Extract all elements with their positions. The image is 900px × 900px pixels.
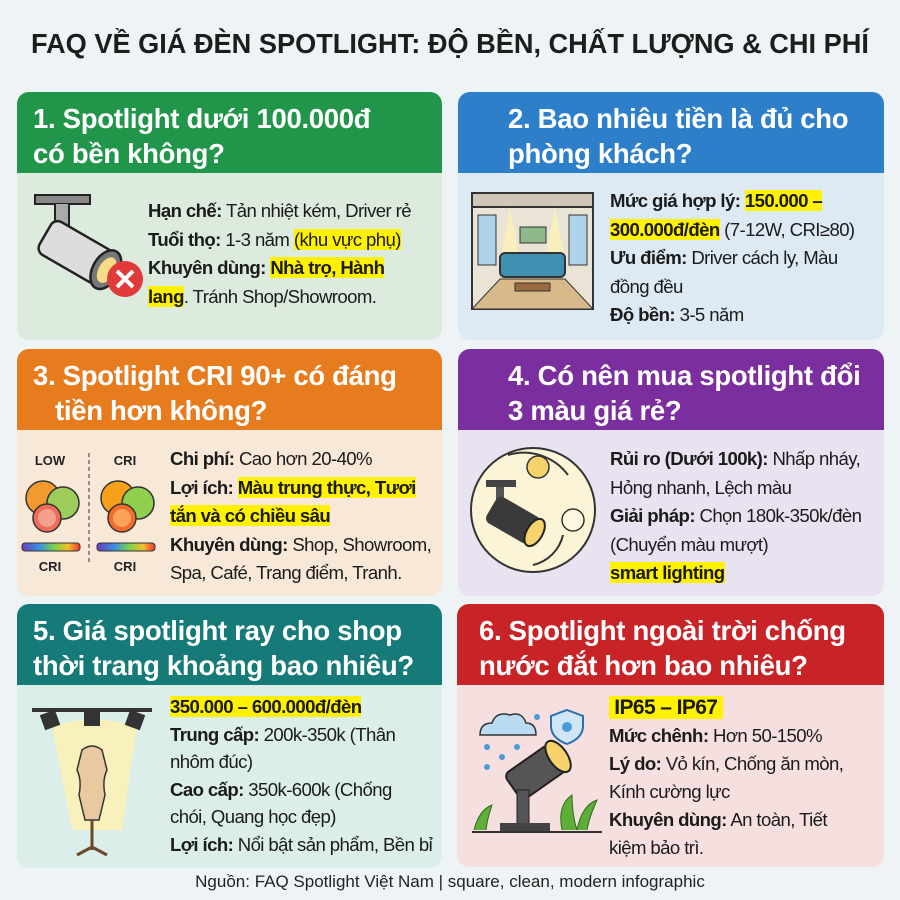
title: FAQ VỀ GIÁ ĐÈN SPOTLIGHT: ĐỘ BỀN, CHẤT LƯỢNG & CHI PHÍ: [31, 28, 869, 59]
icon: CRI fruit comparison: CRI: [114, 559, 136, 574]
text 3: [170, 448, 431, 583]
panel: 6 outdoor waterproof: [457, 604, 884, 867]
heading 1: [17, 92, 442, 173]
heading 6: [457, 604, 884, 685]
text 3: tắn và có chiều sâu: [170, 505, 330, 526]
text 2: Ưu điểm: Driver cách ly, Màu: [610, 247, 838, 268]
heading 6: 6. Spotlight ngoài trời chống: [479, 615, 846, 646]
icon: outdoor spotlight in rain: [472, 708, 602, 833]
text 6: kiệm bảo trì.: [609, 837, 704, 858]
text 1: lang. Tránh Shop/Showroom.: [148, 286, 376, 306]
heading 3: tiền hơn không?: [55, 395, 267, 426]
text 6: Mức chênh: Hơn 50-150%: [609, 725, 822, 746]
heading 3: 3. Spotlight CRI 90+ có đáng: [33, 360, 397, 391]
heading 3: [17, 349, 442, 430]
heading 4: 3 màu giá rẻ?: [508, 395, 681, 426]
heading 5: thời trang khoảng bao nhiêu?: [33, 650, 414, 681]
icon: color-changing spotlight: [470, 447, 596, 573]
text 4: Hỏng nhanh, Lệch màu: [610, 476, 791, 498]
heading 1: 1. Spotlight dưới 100.000đ: [33, 103, 370, 134]
icon: spotlight with x: [34, 194, 143, 297]
text 1: Khuyên dùng: Nhà trọ, Hành: [148, 257, 384, 278]
text 4: smart lighting: [610, 562, 725, 583]
icon: CRI fruit comparison: [22, 453, 156, 574]
icon: CRI fruit comparison: CRI: [39, 559, 61, 574]
text 3: Khuyên dùng: Shop, Showroom,: [170, 534, 431, 554]
icon: CRI fruit comparison: CRI: [114, 453, 136, 468]
heading 4: [458, 349, 884, 430]
heading 4: 4. Có nên mua spotlight đổi: [508, 360, 860, 391]
text 6: Kính cường lực: [609, 781, 730, 802]
text 5: [170, 696, 433, 855]
icon: living room: [470, 192, 594, 310]
text 5: nhôm đúc): [170, 751, 252, 772]
panel: 3 CRI: [17, 349, 442, 596]
text 6: IP65 – IP67: [614, 696, 717, 719]
text 1: [148, 200, 411, 307]
icon: CRI fruit comparison: LOW: [35, 453, 66, 468]
footer source: Nguồn: FAQ Spotlight Việt Nam | square, clean, modern infographic: [195, 872, 705, 891]
panel: 5 fashion shop: [17, 604, 442, 868]
text 1: Tuổi thọ: 1-3 năm (khu vực phụ): [148, 228, 401, 250]
text 3: Chi phí: Cao hơn 20-40%: [170, 448, 372, 469]
text 6: [609, 696, 843, 858]
text 5: 350.000 – 600.000đ/đèn: [170, 696, 361, 717]
text 5: Lợi ích: Nổi bật sản phẩm, Bền bỉ: [170, 834, 432, 854]
text 2: Độ bền: 3-5 năm: [610, 304, 744, 325]
panel: 4 three-color: [458, 349, 884, 596]
text 3: Spa, Café, Trang điểm, Tranh.: [170, 562, 402, 583]
text 2: Mức giá hợp lý: 150.000 –: [610, 190, 822, 211]
text 6: Khuyên dùng: An toàn, Tiết: [609, 809, 827, 830]
icon: track lights with mannequin: [32, 708, 152, 856]
text 6: Lý do: Vỏ kín, Chống ăn mòn,: [609, 753, 843, 774]
heading 5: [17, 604, 442, 685]
text 4: (Chuyển màu mượt): [610, 534, 768, 554]
text 4: Giải pháp: Chọn 180k-350k/đèn: [610, 505, 861, 526]
panel: 1 cheap spotlight: [17, 92, 442, 340]
text 1: Hạn chế: Tản nhiệt kém, Driver rẻ: [148, 200, 411, 221]
heading 2: [458, 92, 884, 173]
text 2: [610, 190, 855, 325]
text 2: đồng đều: [610, 276, 683, 296]
text 4: [610, 448, 861, 583]
text 5: Cao cấp: 350k-600k (Chống: [170, 778, 392, 800]
text 2: 300.000đ/đèn (7-12W, CRI≥80): [610, 218, 855, 240]
heading 6: nước đắt hơn bao nhiêu?: [479, 650, 808, 681]
heading 5: 5. Giá spotlight ray cho shop: [33, 615, 402, 646]
text 5: chói, Quang học đẹp): [170, 806, 336, 827]
text 3: Lợi ích: Màu trung thực, Tươi: [170, 476, 416, 498]
heading 1: có bền không?: [33, 138, 225, 169]
heading 2: 2. Bao nhiêu tiền là đủ cho: [508, 103, 848, 134]
text 5: Trung cấp: 200k-350k (Thân: [170, 724, 395, 744]
text 4: Rủi ro (Dưới 100k): Nhấp nháy,: [610, 448, 860, 469]
heading 2: phòng khách?: [508, 138, 692, 169]
panel: 2 living room: [458, 92, 884, 340]
